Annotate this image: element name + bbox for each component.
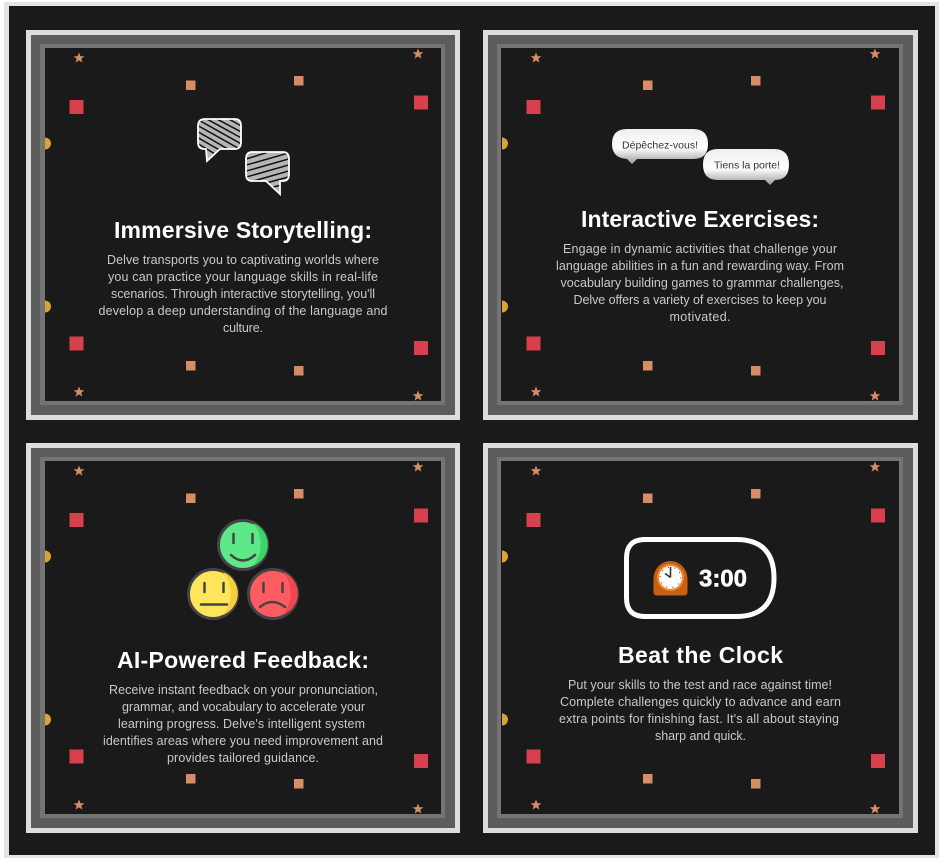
icon: speech bubble Dépêchez-vous: Dépêchez-vous! (622, 140, 698, 152)
timer pill (626, 540, 774, 616)
text block: interactive exercises: Engage in dynamic activities that challenge your (563, 242, 837, 256)
text block: beat the clock (559, 678, 841, 743)
icon: sketched speech bubbles (197, 118, 290, 196)
icon: red sad face (248, 570, 298, 618)
text block: beat the clock: Put your skills to the test and race against time! (568, 678, 832, 692)
text block: AI-powered feedback (103, 683, 383, 765)
icon: speech bubble Tiens la porte (703, 149, 789, 185)
text block: beat the clock: extra points for finishing fast. It's all about staying (559, 712, 839, 726)
heading: interactive exercises: Interactive Exercises: (581, 206, 819, 232)
text block: immersive storytelling: culture. (223, 321, 263, 335)
text block: beat the clock: Complete challenges quickly to advance and earn (560, 695, 841, 709)
text block: immersive storytelling: develop a deep understanding of the language and (98, 304, 388, 318)
text block: AI-powered feedback: learning progress. Delve's intelligent system (118, 717, 365, 731)
text block: immersive storytelling: Delve transports you to captivating worlds where (107, 253, 379, 267)
text block: interactive exercises: language abilities in a fun and rewarding way. From (556, 259, 844, 273)
text block: interactive exercises: motivated. (670, 310, 730, 324)
text block: beat the clock: sharp and quick. (655, 729, 746, 743)
heading: beat the clock: Beat the Clock (618, 642, 783, 668)
text block: interactive exercises (556, 242, 844, 324)
heading: immersive storytelling: Immersive Storytelling: (114, 217, 372, 243)
text block: immersive storytelling: you can practice your language skills in real-life (108, 270, 378, 284)
text block: AI-powered feedback: identifies areas where you need improvement and (103, 734, 383, 748)
heading: AI-powered feedback: AI-Powered Feedback: (117, 647, 369, 673)
panel: interactive exercises (483, 30, 918, 420)
icon: green smiling face (218, 520, 268, 570)
icon: alarm clock (654, 561, 688, 596)
text block: interactive exercises: Delve offers a variety of exercises to keep you (574, 293, 827, 307)
text block: AI-powered feedback: Receive instant feedback on your pronunciation, (109, 683, 378, 697)
panel: immersive storytelling (26, 30, 460, 420)
text block: AI-powered feedback: provides tailored guidance. (167, 751, 319, 765)
text block: AI-powered feedback: grammar, and vocabulary to accelerate your (122, 700, 365, 714)
text block: immersive storytelling: scenarios. Through interactive storytelling, you'll (111, 287, 375, 301)
timer value: 3:00 (699, 566, 747, 592)
text block: immersive storytelling (98, 253, 388, 335)
panel: beat the clock (483, 443, 918, 833)
icon: speech bubble Tiens la porte: Tiens la porte! (714, 160, 780, 172)
text block: interactive exercises: vocabulary building games to grammar challenges, (560, 276, 844, 290)
panel: AI-powered feedback (26, 443, 460, 833)
icon: speech bubble Dépêchez-vous (612, 129, 708, 164)
icon: yellow neutral face (188, 570, 238, 618)
